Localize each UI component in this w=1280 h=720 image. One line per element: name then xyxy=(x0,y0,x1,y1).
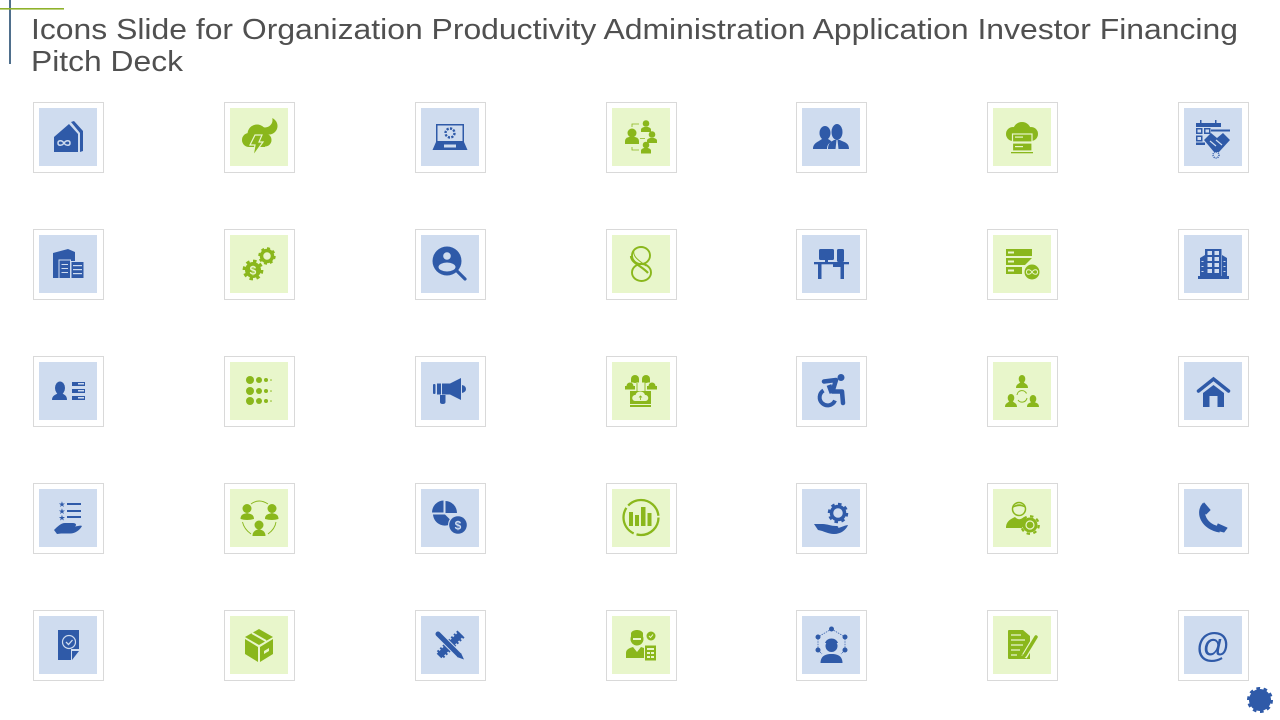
tile: phone xyxy=(1178,484,1248,554)
tile: at sign xyxy=(1178,610,1248,680)
icon: dollar gears: $ xyxy=(250,264,257,278)
icon: laptop xyxy=(432,124,468,150)
tile: star list hand xyxy=(34,484,104,554)
icon: team network xyxy=(625,120,657,154)
tile: team cycle xyxy=(988,356,1058,426)
tile: home xyxy=(1178,356,1248,426)
icon: at sign: @ xyxy=(1196,627,1230,665)
icon: dot matrix xyxy=(246,376,272,405)
icon: star list hand xyxy=(54,500,82,534)
title: Icons Slide for Organization Productivity Administration Application Investor Financing xyxy=(31,14,1238,46)
tile: person search xyxy=(416,230,486,300)
tile: person with gear xyxy=(988,484,1058,554)
icon: two businessmen xyxy=(813,124,849,149)
icon: package box xyxy=(245,629,273,662)
tile: desk xyxy=(796,230,866,300)
icon: storm cloud and moon xyxy=(242,112,278,156)
icon: pencil and ruler xyxy=(438,634,464,660)
tile: cloud upload laptop xyxy=(606,356,676,426)
title xyxy=(31,14,1238,78)
icon: megaphone xyxy=(433,378,466,404)
icon: star list hand: ★ xyxy=(58,507,66,516)
icon: calendar handshake xyxy=(1196,120,1230,158)
tile: team network xyxy=(606,102,676,172)
tile: server infinity xyxy=(988,230,1058,300)
icon: team cycle xyxy=(1005,375,1039,407)
icon: server infinity xyxy=(1006,249,1040,280)
icon: infinity house xyxy=(54,121,83,152)
tile: cloud server xyxy=(988,102,1058,172)
tile: pencil and ruler xyxy=(416,610,486,680)
icon: phone xyxy=(1201,503,1227,532)
icon: person search xyxy=(432,246,465,279)
tile: dot matrix xyxy=(224,356,294,426)
icon: person with gear xyxy=(1006,502,1039,534)
tile: dollar gears xyxy=(224,230,294,300)
icon: wheelchair xyxy=(820,374,844,405)
tile: office buildings xyxy=(34,230,104,300)
icon: profile list xyxy=(52,382,85,400)
tile: person with calculator xyxy=(606,610,676,680)
tile: calendar handshake xyxy=(1178,102,1248,172)
icon: team circle xyxy=(240,501,278,536)
tile: laptop xyxy=(416,102,486,172)
icon: number eight xyxy=(631,247,651,281)
icon: cloud upload laptop xyxy=(625,375,657,407)
icon: person with calculator xyxy=(626,630,656,661)
tile: team circle xyxy=(224,484,294,554)
tile: certified document xyxy=(34,610,104,680)
icon: hand gear xyxy=(814,504,848,534)
icon: desk xyxy=(814,249,849,279)
tile: two businessmen xyxy=(796,102,866,172)
title: Pitch Deck xyxy=(31,46,184,78)
tile: person network xyxy=(796,610,866,680)
icon: bar chart ring xyxy=(624,500,658,535)
tile: office tower xyxy=(1178,230,1248,300)
corner accent lines xyxy=(0,0,64,64)
icon: office buildings xyxy=(53,249,84,278)
tile: profile list xyxy=(34,356,104,426)
tile: document with pencil xyxy=(988,610,1058,680)
icon: office tower xyxy=(1198,249,1229,279)
tile: number eight xyxy=(606,230,676,300)
tile: package box xyxy=(224,610,294,680)
icon: cloud server xyxy=(1006,122,1038,153)
tile: megaphone xyxy=(416,356,486,426)
tile: storm cloud and moon xyxy=(224,102,294,172)
icon: document with pencil xyxy=(1008,630,1036,659)
tile: hand gear xyxy=(796,484,866,554)
tile: infinity house xyxy=(34,102,104,172)
icon: person network xyxy=(816,626,848,663)
icon: certified document xyxy=(58,630,79,660)
icon: star list hand: ★ xyxy=(58,500,66,509)
icon: star list hand: ★ xyxy=(58,514,66,522)
tile: bar chart ring xyxy=(606,484,676,554)
tile: pie chart dollar xyxy=(416,484,486,554)
icon: pie chart dollar: $ xyxy=(455,518,462,532)
icon: settings gear xyxy=(1248,688,1272,712)
icon: home xyxy=(1198,379,1228,407)
tile: wheelchair xyxy=(796,356,866,426)
